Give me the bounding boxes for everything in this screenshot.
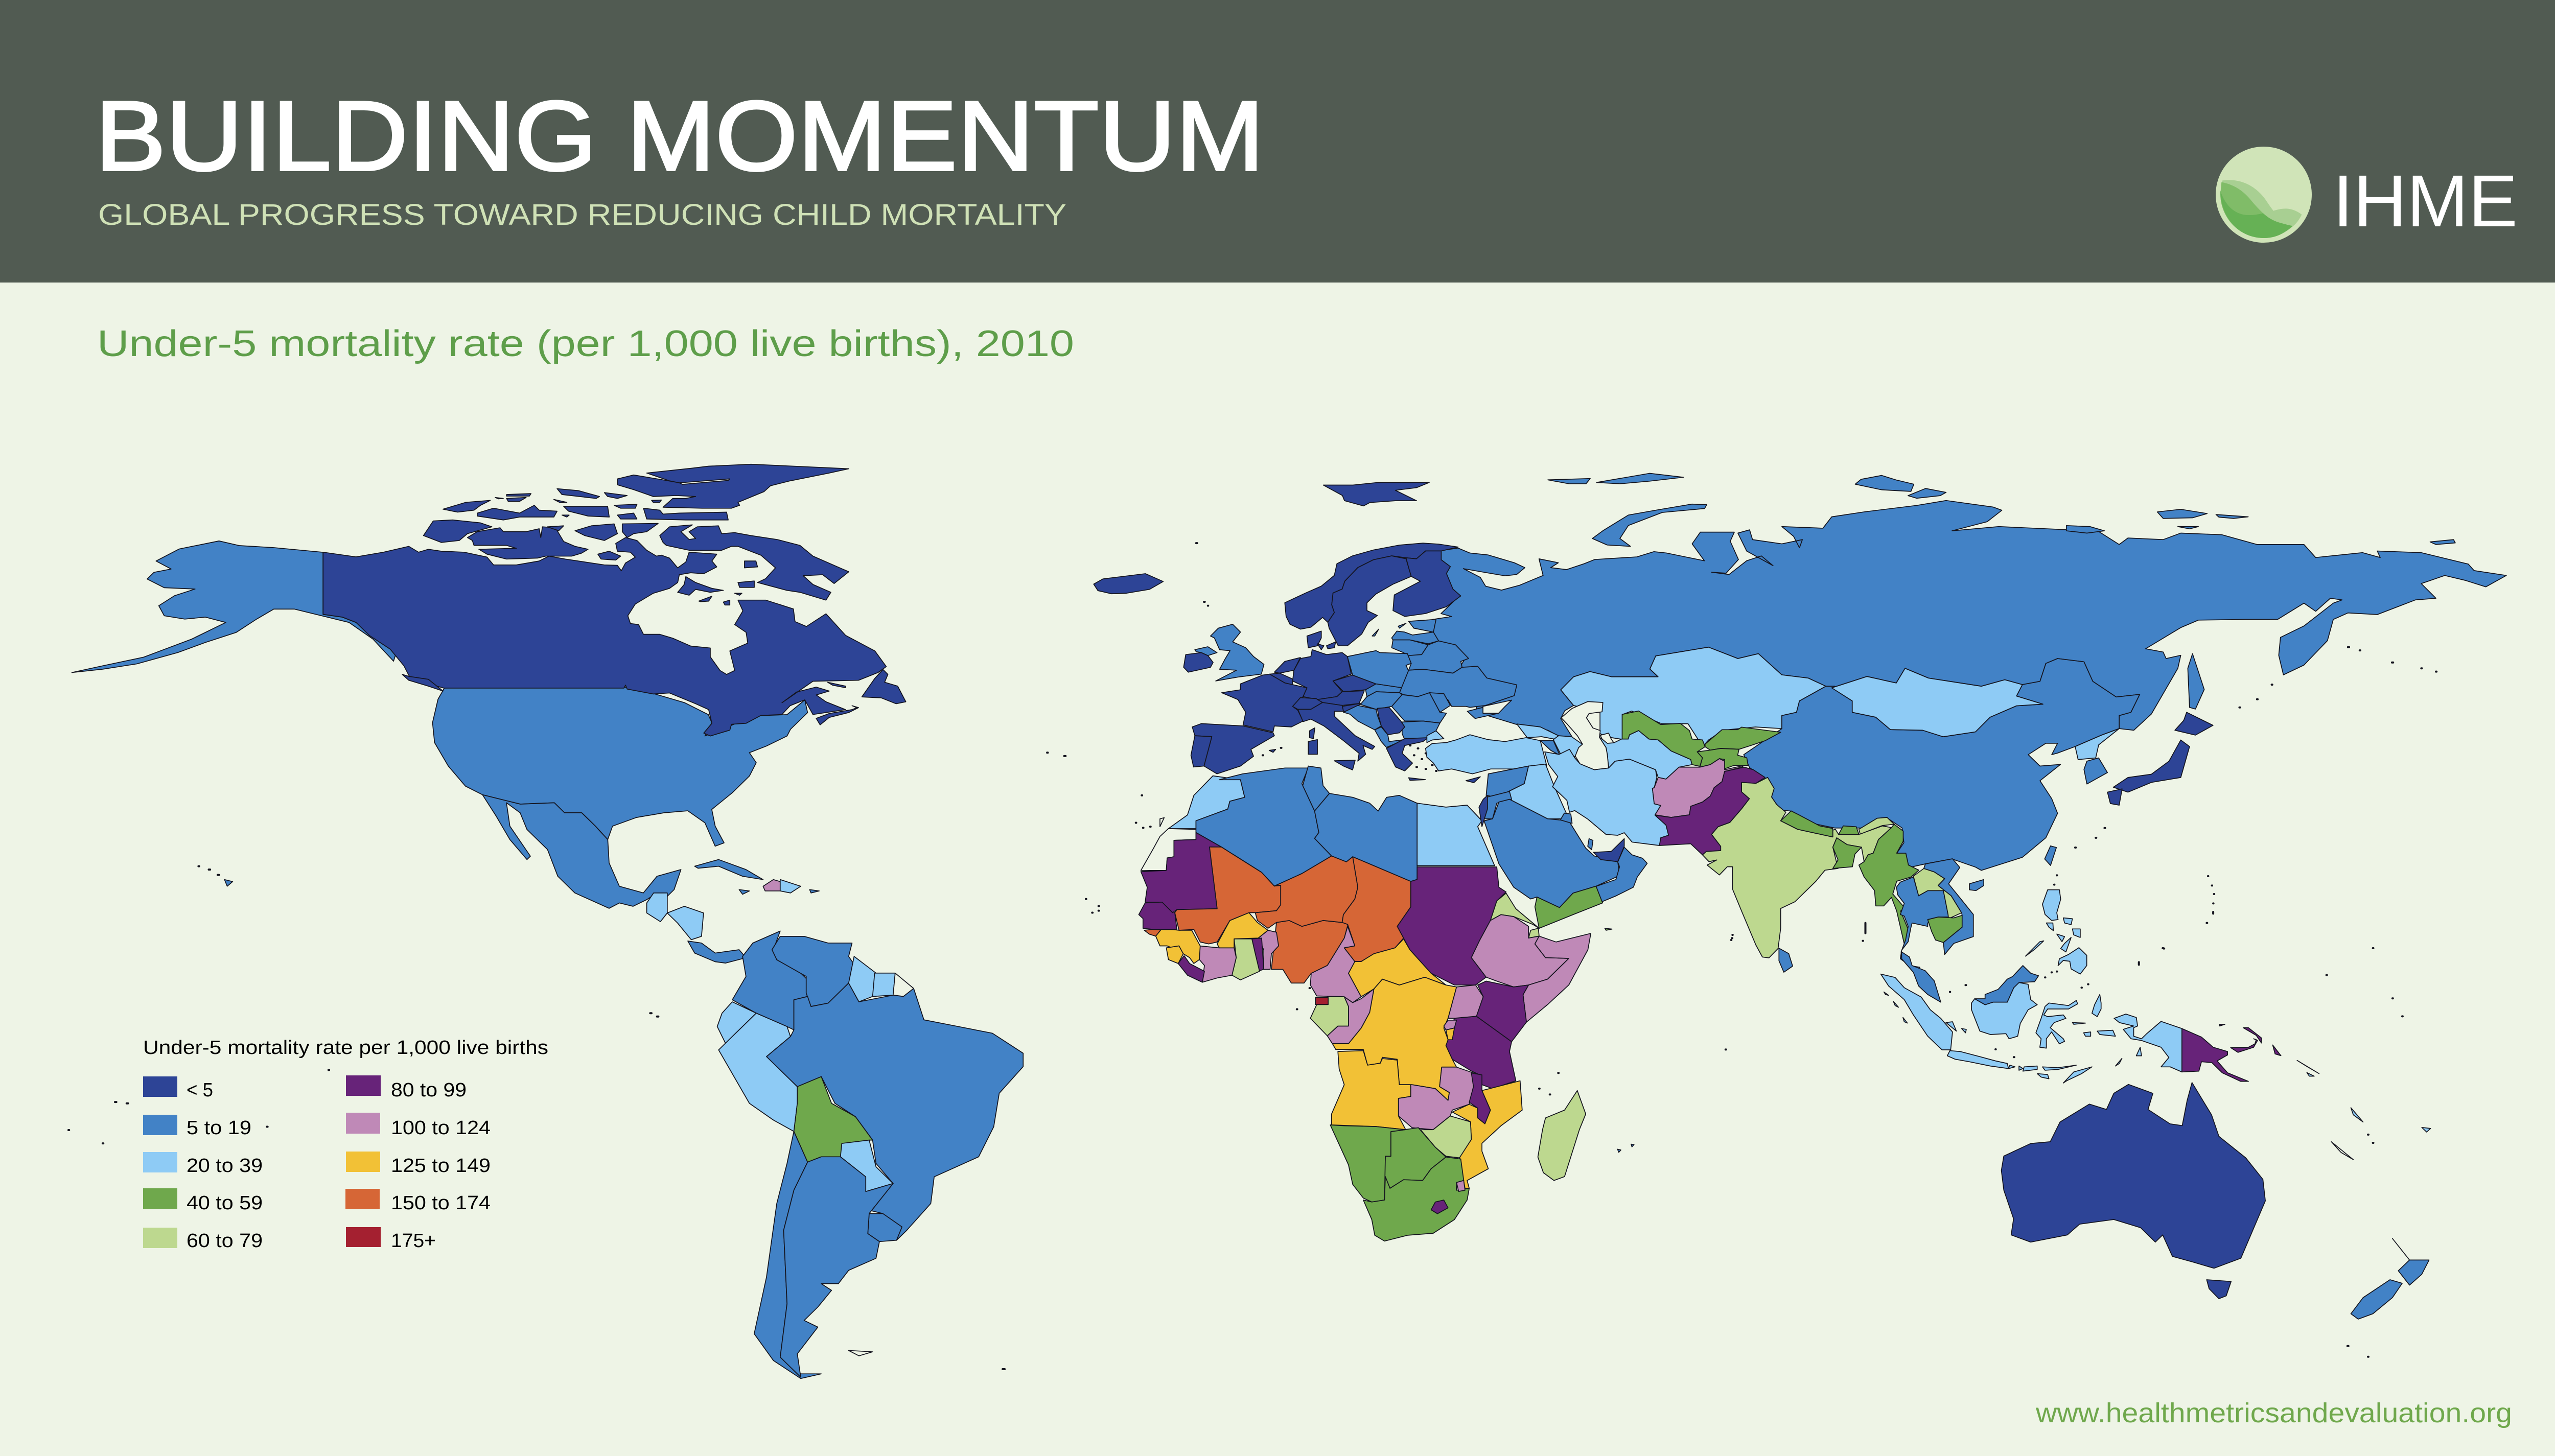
region: Africa and Middle East [1086, 764, 1732, 1241]
island: Socotra [1605, 928, 1612, 930]
island: Taiwan [2045, 846, 2056, 865]
island: Ellesmere and Axel Heiberg [617, 464, 849, 508]
legend item: 5 to 19: 5 to 19 [187, 1117, 251, 1139]
legend [143, 1037, 548, 1252]
country: Madagascar [1538, 1091, 1586, 1181]
island: Devon [643, 508, 728, 520]
country: Sri Lanka [1779, 948, 1793, 972]
country: Denmark [1307, 631, 1336, 650]
country: United Arab Emirates [1593, 839, 1624, 862]
country: Syria [1486, 766, 1528, 797]
legend item: 125 to 149 [346, 1152, 491, 1177]
country: Cameroon [1310, 926, 1361, 1002]
country: Iran [1545, 749, 1668, 846]
country: Mali [1175, 847, 1281, 944]
country: Chile [754, 1132, 821, 1378]
subtitle: GLOBAL PROGRESS TOWARD REDUCING CHILD MORTALITY [98, 198, 1066, 231]
country: Bolivia [794, 1076, 873, 1162]
country: North Korea [2075, 729, 2119, 760]
country: Georgia [1517, 724, 1559, 740]
country: Chad [1342, 857, 1411, 961]
islands: Aegean and Mediterranean [1196, 543, 1436, 771]
legend item: 100 to 124: 100 to 124 [391, 1117, 491, 1139]
country: Papua New Guinea [2182, 1024, 2262, 1082]
legend item: 20 to 39 [143, 1152, 263, 1177]
country: Latvia [1391, 631, 1438, 644]
country: Peru [718, 1013, 797, 1132]
country: Togo [1252, 938, 1264, 971]
legend item: 60 to 79 [143, 1228, 263, 1252]
world map [68, 464, 2506, 1378]
country: Uruguay [868, 1213, 902, 1241]
country: Lesotho [1431, 1200, 1448, 1214]
country: Iraq [1497, 764, 1569, 819]
country: Russia [1430, 501, 2506, 739]
legend item: 100 to 124 [346, 1113, 491, 1139]
country: Burkina Faso [1217, 912, 1268, 948]
country: Zimbabwe [1421, 1116, 1471, 1158]
country: Honduras and Nicaragua [667, 906, 704, 940]
island: Victoria [468, 527, 588, 559]
country: Turkey [1426, 735, 1547, 774]
island: Cuba [694, 859, 763, 880]
island: Puerto Rico [809, 889, 819, 893]
country: Guyana [849, 956, 876, 1002]
country: Cote d'Ivoire [1199, 946, 1236, 982]
island: Baffin [660, 525, 849, 600]
country: Dominican Republic [780, 880, 801, 893]
country: Bhutan [1839, 826, 1859, 834]
region: Northern Ireland [1195, 647, 1217, 655]
island: Newfoundland [862, 670, 906, 704]
legend item: 5 to 19 [143, 1115, 251, 1139]
region: Oceania [1779, 948, 2430, 1357]
country: Ukraine [1400, 666, 1517, 708]
lake: Caspian Sea [1561, 701, 1609, 770]
country: Benin [1258, 930, 1279, 969]
island: Southampton [678, 577, 723, 595]
country: Serbia [1377, 708, 1405, 735]
country: Nigeria [1271, 921, 1349, 983]
country: Kenya [1476, 981, 1528, 1042]
country: Ireland [1183, 652, 1213, 672]
country: Uganda [1448, 985, 1483, 1018]
country: Egypt [1417, 803, 1495, 866]
region: Western Sahara [1141, 829, 1196, 871]
country: Sierra Leone [1166, 946, 1183, 964]
country: Spain [1192, 723, 1275, 774]
country: Swaziland [1456, 1181, 1465, 1191]
legend item: 150 to 174: 150 to 174 [391, 1192, 491, 1214]
islands: Franz Josef Land [1548, 474, 1683, 484]
country: Croatia and Bosnia [1343, 706, 1381, 730]
country: France [1222, 674, 1307, 732]
country: Armenia [1540, 741, 1560, 755]
island: Gotland [1372, 629, 1379, 636]
country: Equatorial Guinea [1315, 998, 1328, 1004]
legend item: less than 5: < 5 [187, 1079, 213, 1101]
islands: Pacific [2163, 948, 2430, 1357]
island: Bougainville [2272, 1045, 2281, 1055]
country: Oman [1596, 847, 1647, 902]
country: Finland [1393, 551, 1461, 617]
country: Iceland [1094, 574, 1163, 594]
country: Laos [1913, 868, 1962, 919]
country: Mauritania [1141, 833, 1221, 912]
country: Poland [1348, 651, 1411, 688]
country: Venezuela [772, 936, 863, 1006]
country: Morocco [1169, 776, 1245, 829]
country: Philippines [2026, 890, 2087, 974]
country: Canada, mainland [323, 537, 886, 736]
country: Qatar [1588, 839, 1593, 850]
legend item: 175+ [346, 1227, 436, 1252]
country: Sudan [1397, 867, 1506, 985]
country: Ghana [1232, 939, 1260, 980]
country: Botswana [1384, 1128, 1446, 1188]
country: Portugal [1191, 736, 1212, 767]
country: Angola [1332, 1051, 1411, 1130]
legend item: 80 to 99: 80 to 99 [391, 1079, 467, 1101]
islands: Russian Arctic [1855, 476, 2455, 545]
country: Turkmenistan [1599, 731, 1692, 779]
country: United States, Alaska [72, 541, 397, 672]
country: Malaysia Borneo [1975, 966, 2038, 1005]
country: Paraguay [841, 1140, 893, 1191]
country: Belarus [1406, 641, 1469, 673]
islands: Parry and Queen Elizabeth [477, 489, 661, 520]
region: South and Central Asia [1545, 701, 1919, 958]
logo: IHME [2216, 147, 2518, 243]
map heading: Under-5 mortality rate (per 1,000 live births), 2010 [97, 323, 1074, 364]
logo: IHME: IHME [2333, 160, 2518, 242]
website URL: www.healthmetricsandevaluation.org [2035, 1398, 2512, 1428]
country: Lithuania [1391, 640, 1428, 656]
country: India [1703, 778, 1892, 958]
legend item: 40 to 59: 40 to 59 [187, 1192, 263, 1214]
region: Russia and East Asia [1430, 476, 2506, 871]
region: Southeast Asia [1881, 859, 2262, 1083]
country: Belgium [1270, 673, 1293, 685]
country: Japan [2107, 712, 2213, 805]
region: Europe [1183, 543, 1584, 783]
country: Pakistan [1655, 767, 1765, 855]
country: Israel [1479, 795, 1488, 827]
country: Zambia [1399, 1067, 1473, 1130]
island: Vancouver [402, 674, 443, 691]
country: United States, contiguous [432, 687, 807, 846]
islands: Pacific dots [1950, 875, 2214, 1057]
country: Netherlands [1274, 657, 1300, 673]
country: Bulgaria [1402, 721, 1440, 740]
country: Namibia [1330, 1125, 1406, 1202]
legend item: 20 to 39: 20 to 39 [187, 1155, 263, 1177]
country: Italy [1298, 702, 1375, 770]
country: Czech Republic [1333, 675, 1376, 692]
country: Kuwait [1561, 813, 1572, 824]
sound fjord cuts in Ellesmere [679, 479, 730, 484]
country: Jordan [1484, 791, 1512, 819]
legend item: 80 to 99 [346, 1075, 467, 1101]
island: Hainan [1969, 880, 1984, 890]
country: Guinea-Bissau [1144, 928, 1162, 936]
country: Uzbekistan [1622, 711, 1705, 766]
country: Australia [2002, 1083, 2265, 1268]
islands: Kuril arc and Japan south dots [2075, 647, 2436, 848]
country: Burundi [1446, 1028, 1454, 1040]
country: United Kingdom [1211, 624, 1264, 681]
country: Romania [1391, 693, 1447, 723]
country: Malawi [1469, 1073, 1491, 1124]
island: Svalbard [1323, 482, 1429, 506]
country: Central African Republic [1349, 939, 1446, 997]
country: Liberia [1178, 956, 1204, 982]
islands: Falklands [849, 1350, 873, 1356]
islands: Atlantic and Indian Ocean [1086, 795, 1732, 1153]
country: Slovenia [1342, 703, 1360, 712]
country: Gabon [1310, 997, 1349, 1036]
country: Brazil [766, 983, 1023, 1240]
region: Turkish Thrace [1427, 731, 1444, 742]
country: Ecuador [717, 1002, 756, 1043]
country: Guatemala [647, 893, 667, 922]
country: Djibouti [1528, 928, 1539, 938]
country: Moldova [1429, 693, 1450, 712]
country: Algeria [1196, 768, 1332, 886]
country: Switzerland [1293, 697, 1322, 709]
region: French Guiana [893, 973, 914, 997]
country: Indonesia [1881, 974, 2182, 1083]
island: Banks [424, 520, 492, 543]
country: Malaysia peninsula [1901, 952, 1941, 1002]
country: Austria [1317, 691, 1364, 706]
country: Colombia [732, 931, 807, 1030]
country: Norway [1285, 543, 1458, 629]
islands: Hudson Bay and Foxe Basin [699, 561, 757, 605]
country: Hungary [1360, 692, 1402, 709]
region: Canada [323, 464, 906, 736]
island: Saaremaa [1398, 623, 1406, 628]
country: Bangladesh [1833, 838, 1862, 868]
country: Greece [1386, 738, 1428, 780]
country: South Korea [2084, 758, 2107, 784]
country: Germany [1293, 650, 1351, 699]
island: Novaya Zemlya [1592, 504, 1707, 546]
country: Democratic Republic of Congo [1332, 977, 1456, 1100]
title: BUILDING MOMENTUM [95, 81, 1264, 192]
country: Mongolia [1832, 668, 2043, 737]
country: Senegal [1139, 902, 1177, 929]
region: Crimea [1467, 708, 1499, 718]
islands: Lakshadweep and Andaman dots [1731, 923, 1866, 941]
country: Eritrea [1491, 893, 1539, 928]
country: Estonia [1409, 619, 1436, 632]
island: Cyprus [1466, 777, 1480, 783]
country: Haiti [763, 880, 780, 891]
country: New Zealand [2351, 1238, 2429, 1319]
country: Yemen [1535, 886, 1602, 928]
legend item: 175+: 175+ [391, 1230, 436, 1252]
island: Sakhalin [2188, 653, 2204, 709]
region: Arunachal Pradesh [1859, 817, 1894, 834]
country: Saudi Arabia [1484, 800, 1620, 908]
country: Mozambique [1452, 1081, 1522, 1188]
islands: central Arctic [547, 524, 658, 560]
country: Niger [1256, 856, 1358, 928]
country: Azerbaijan [1553, 736, 1584, 757]
legend item: 150 to 174 [345, 1189, 491, 1214]
legend item: 60 to 79: 60 to 79 [187, 1230, 263, 1252]
header band [0, 0, 2555, 283]
country: Libya [1315, 793, 1417, 881]
legend item: 125 to 149: 125 to 149 [391, 1155, 491, 1177]
island: Melville [443, 501, 490, 512]
country: Tanzania [1446, 1016, 1516, 1089]
country: Sweden [1328, 556, 1411, 646]
legend title: Under-5 mortality rate per 1,000 live births [143, 1037, 548, 1059]
lake: Aral Sea [1600, 733, 1614, 743]
islands: Galapagos and scattered Pacific [68, 753, 1065, 1369]
country: Albania and Macedonia [1375, 727, 1405, 747]
country: Somalia [1523, 933, 1591, 1022]
country: Kazakhstan [1561, 647, 1826, 746]
legend item: less than 5 [143, 1076, 213, 1101]
island: Anticosti [828, 682, 846, 688]
sea: Azov [1483, 700, 1512, 713]
country: Nepal [1781, 811, 1833, 837]
country: Tunisia [1303, 766, 1330, 811]
region: Americas [68, 541, 1065, 1378]
country: Suriname [873, 973, 895, 997]
country: Costa Rica and Panama [688, 941, 746, 963]
country: China [1744, 659, 2140, 871]
country: Ethiopia [1471, 914, 1569, 987]
country: Thailand [1896, 877, 1948, 972]
islands: Hawaii [198, 866, 233, 886]
country: Vietnam [1924, 859, 1973, 954]
country: Republic of Congo [1327, 989, 1374, 1044]
country: Rwanda [1444, 1020, 1456, 1030]
country: Kyrgyzstan [1705, 727, 1781, 750]
country: Slovakia [1365, 684, 1402, 697]
country: Mexico [482, 795, 681, 908]
island: Tasmania [2206, 1280, 2231, 1299]
region: Nova Scotia [816, 706, 858, 725]
island: Jamaica [739, 889, 750, 894]
country: Myanmar [1859, 824, 1919, 945]
country: Guinea [1156, 928, 1200, 964]
country: Cambodia [1927, 915, 1962, 943]
country: Tajikistan [1697, 748, 1748, 769]
country: Argentina [780, 1157, 893, 1377]
country: Afghanistan [1653, 759, 1744, 817]
legend item: 40 to 59 [143, 1188, 263, 1214]
country: South Africa [1363, 1157, 1469, 1241]
region: northern islands [1094, 474, 1707, 594]
